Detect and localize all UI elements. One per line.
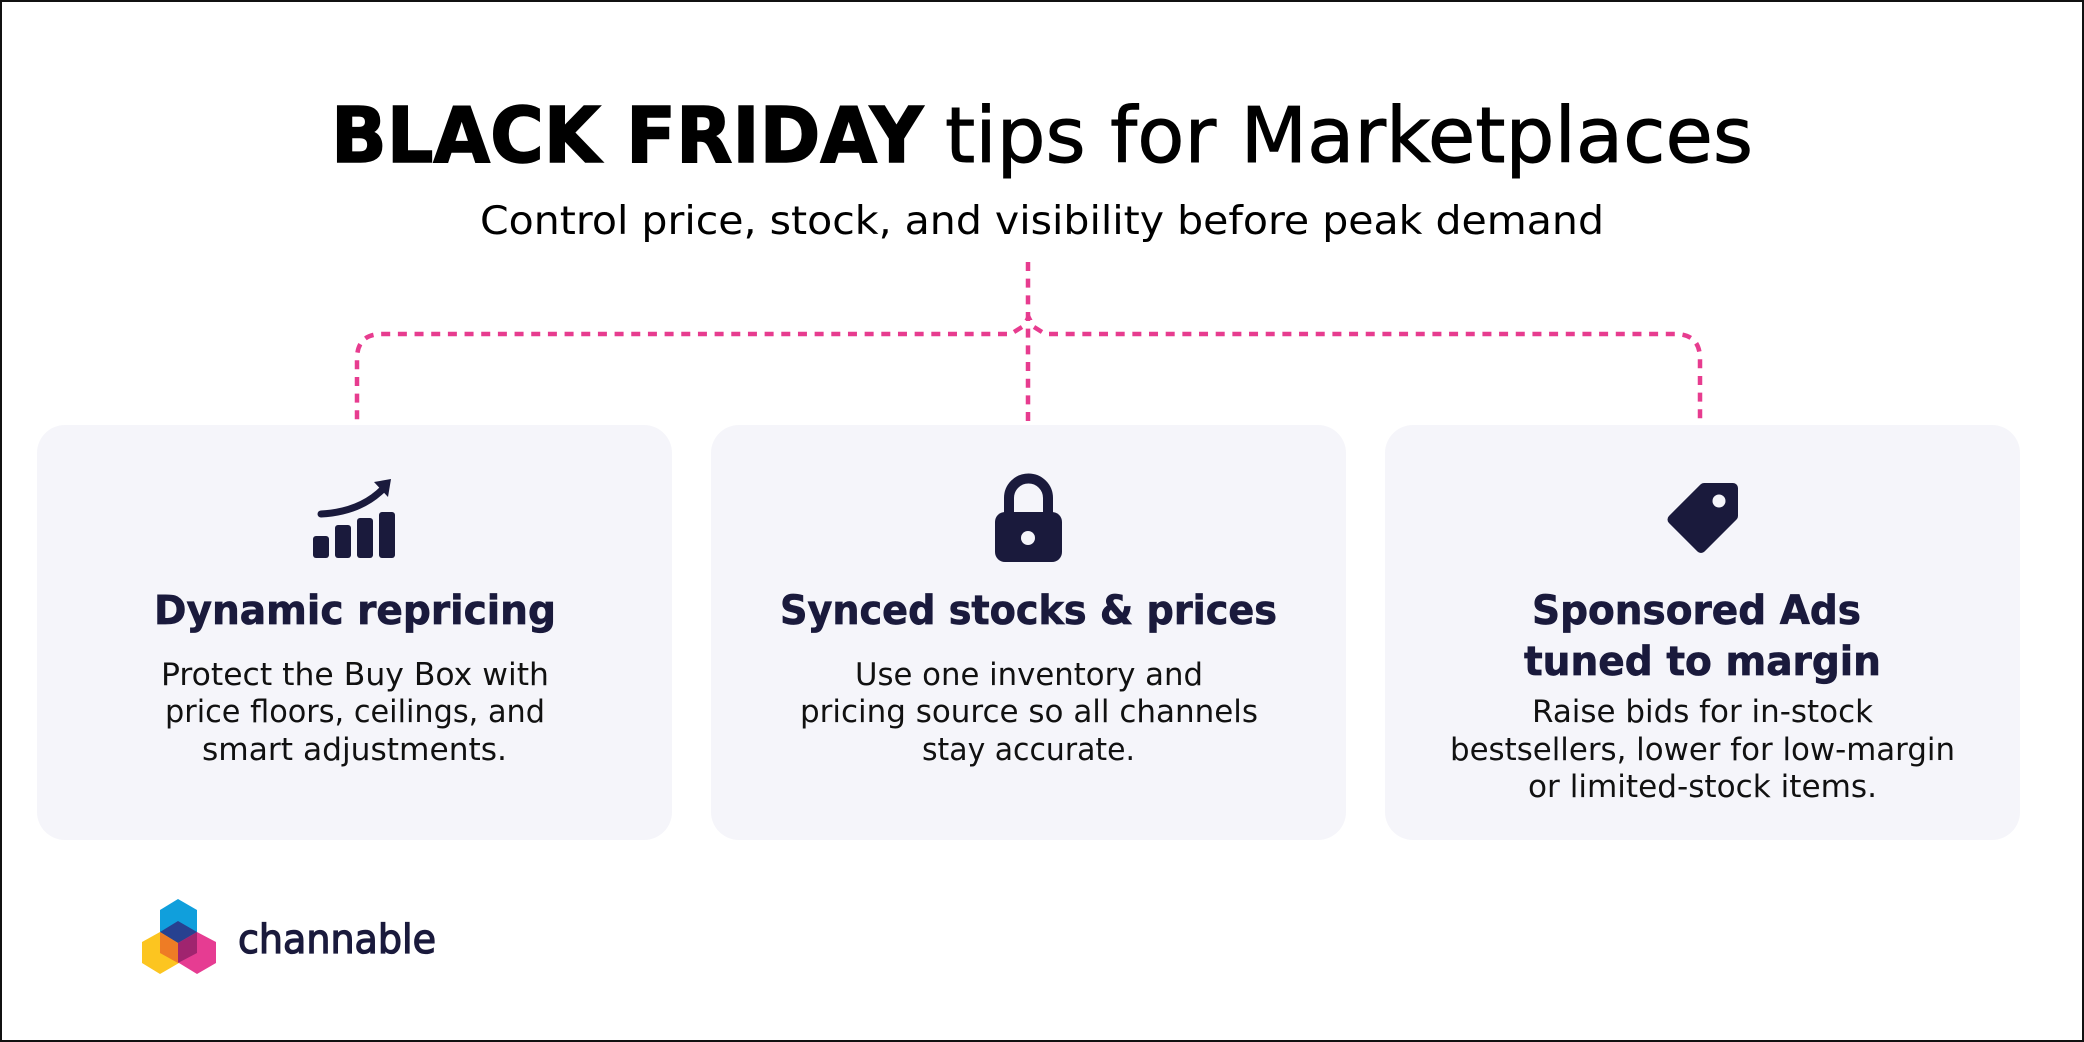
heading: sponsored ads tuned to margin: tuned to margin [1524,639,1881,685]
body text: dynamic repricing [161,657,549,768]
heading: synced stocks and prices: Synced stocks & prices [780,588,1277,634]
icon: price tag [1672,488,1733,548]
icon: three overlapping hexagons [142,899,216,974]
body text: sponsored ads: or limited-stock items. [1528,769,1877,805]
body text: dynamic repricing: price floors, ceilings, and [165,694,545,730]
panel: sponsored ads [1385,425,2020,840]
wordmark: channable [238,917,436,963]
icon: rising bar chart with arrow [313,479,395,558]
logo: channable [142,899,436,974]
icon: padlock [995,478,1062,562]
body text: synced stocks and prices [800,657,1258,768]
subtitle: Control price, stock, and visibility before peak demand [480,199,1604,244]
panel: synced stocks and prices [711,425,1346,840]
body text: sponsored ads: bestsellers, lower for low-margin [1450,732,1955,768]
body text: synced stocks and prices: pricing source so all channels [800,694,1258,730]
title [331,92,1753,181]
body text: sponsored ads: Raise bids for in-stock [1532,694,1873,730]
heading: dynamic repricing: Dynamic repricing [154,588,556,634]
body text: dynamic repricing: smart adjustments. [202,732,507,768]
title: BLACK FRIDAY [331,92,924,181]
body text: dynamic repricing: Protect the Buy Box with [161,657,549,693]
body text: synced stocks and prices: stay accurate. [922,732,1135,768]
body text: synced stocks and prices: Use one inventory and [855,657,1203,693]
body text: sponsored ads [1450,694,1955,805]
heading: sponsored ads tuned to margin [1524,588,1881,685]
heading: sponsored ads tuned to margin: Sponsored Ads [1532,588,1861,634]
title: tips for Marketplaces [945,92,1753,181]
panel: dynamic repricing [37,425,672,840]
dashed connector lines [357,262,1700,422]
